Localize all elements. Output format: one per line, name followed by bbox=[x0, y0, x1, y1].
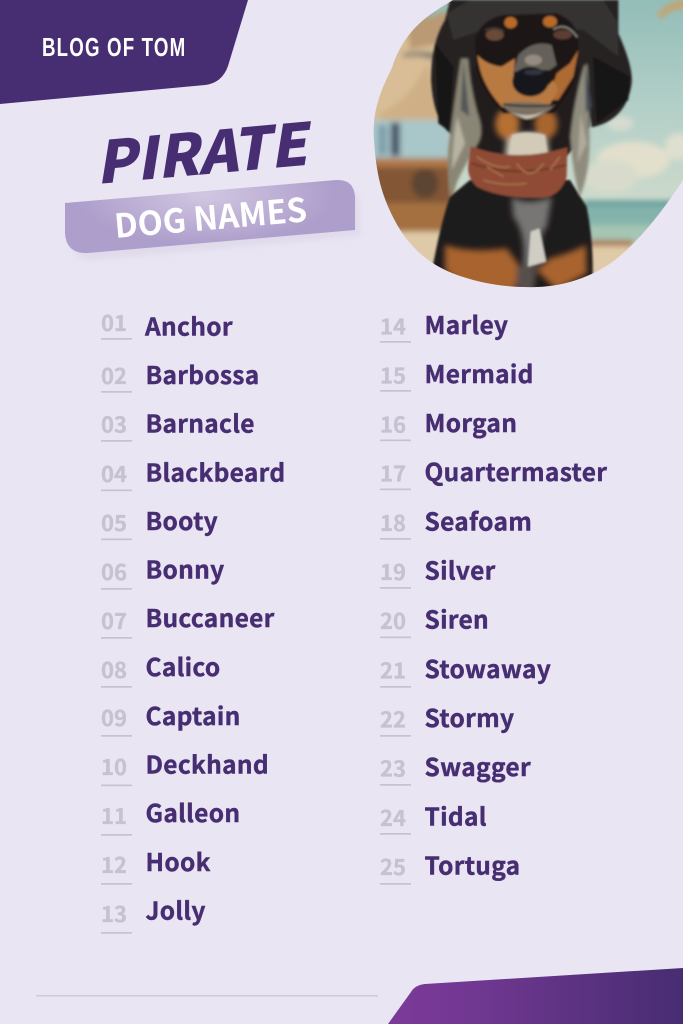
item 06 bbox=[101, 552, 224, 590]
item 09 bbox=[101, 698, 241, 737]
item 09: Captain bbox=[146, 698, 241, 733]
subtitle text: DOG NAMES bbox=[112, 183, 309, 248]
item 22: Stormy bbox=[424, 700, 514, 735]
item 05 bbox=[101, 503, 218, 540]
ship cabin bbox=[370, 120, 450, 158]
item 18: Seafoam bbox=[424, 504, 532, 538]
item 24 bbox=[380, 798, 487, 835]
item 12: 12 bbox=[101, 848, 127, 880]
item 18: 18 bbox=[380, 506, 406, 538]
item 04: 04 bbox=[101, 457, 127, 489]
item 19: 19 bbox=[380, 555, 406, 587]
item 17: 17 bbox=[380, 457, 406, 489]
item 15: Mermaid bbox=[424, 356, 534, 391]
pirate hat bbox=[431, 0, 632, 133]
item 13: Jolly bbox=[146, 892, 206, 928]
sea bbox=[585, 202, 668, 228]
item 02: Barbossa bbox=[146, 357, 259, 392]
tan cheeks bbox=[477, 55, 520, 113]
item 16: Morgan bbox=[424, 405, 517, 440]
footer rule bbox=[36, 995, 378, 996]
item 16: 16 bbox=[380, 408, 406, 440]
item 08: 08 bbox=[101, 653, 127, 685]
item 12 bbox=[101, 844, 211, 885]
item 21: 21 bbox=[380, 654, 406, 686]
item 07: Buccaneer bbox=[146, 600, 275, 635]
collar bbox=[468, 146, 567, 198]
item 10 bbox=[101, 746, 269, 786]
ship hull bbox=[370, 158, 453, 203]
item 24: 24 bbox=[380, 801, 406, 833]
sky bbox=[370, 0, 683, 300]
item 11: Galleon bbox=[146, 795, 240, 830]
item 25 bbox=[380, 847, 520, 885]
item 18 bbox=[380, 504, 532, 540]
item 01 bbox=[101, 306, 233, 344]
item 03: 03 bbox=[101, 408, 127, 440]
item 01: Anchor bbox=[144, 309, 233, 344]
item 11: 11 bbox=[101, 799, 127, 831]
item 23 bbox=[380, 749, 531, 786]
item 21: Stowaway bbox=[424, 651, 551, 686]
item 06: Bonny bbox=[146, 552, 224, 586]
item 07: 07 bbox=[101, 604, 127, 636]
item 14 bbox=[380, 307, 508, 343]
title: PIRATE: PIRATE bbox=[91, 97, 317, 201]
item 10: Deckhand bbox=[146, 746, 269, 782]
item 06: 06 bbox=[101, 555, 127, 587]
subtitle ribbon: DOG NAMES bbox=[65, 180, 360, 260]
item 20 bbox=[380, 602, 489, 638]
item 03 bbox=[101, 406, 255, 442]
item 11 bbox=[101, 795, 240, 836]
item 03: Barnacle bbox=[146, 406, 255, 440]
hair left bbox=[448, 58, 592, 197]
item 17: Quartermaster bbox=[424, 454, 607, 489]
ship sail bbox=[370, 20, 450, 120]
item 04: Blackbeard bbox=[146, 454, 285, 490]
item 13: 13 bbox=[101, 897, 127, 929]
mouth bbox=[502, 102, 555, 119]
item 10: 10 bbox=[101, 750, 127, 782]
item 13 bbox=[101, 892, 206, 934]
item 08: Calico bbox=[146, 649, 221, 684]
header banner bbox=[0, 0, 248, 104]
eyebrows bbox=[504, 17, 517, 28]
item 14: Marley bbox=[424, 307, 508, 342]
sand bbox=[401, 230, 452, 273]
item 25: Tortuga bbox=[424, 847, 520, 882]
item 09: 09 bbox=[101, 701, 127, 733]
body bbox=[431, 0, 632, 293]
names list: left column bbox=[101, 306, 285, 934]
photo: pirate dachshund in blob frame bbox=[370, 0, 683, 300]
snout bbox=[513, 43, 557, 72]
item 07 bbox=[101, 600, 275, 639]
item 16 bbox=[380, 405, 517, 441]
item 19 bbox=[380, 552, 496, 589]
item 20: 20 bbox=[380, 604, 406, 636]
item 20: Siren bbox=[424, 602, 489, 636]
item 08 bbox=[101, 649, 221, 688]
item 22: 22 bbox=[380, 703, 406, 735]
item 01: 01 bbox=[101, 306, 127, 338]
item 24: Tidal bbox=[424, 798, 487, 833]
item 23: 23 bbox=[380, 752, 406, 784]
item 14: 14 bbox=[380, 310, 406, 342]
item 05: Booty bbox=[146, 503, 218, 538]
item 15: 15 bbox=[380, 358, 406, 390]
footer corner shape bbox=[388, 968, 683, 1024]
item 19: Silver bbox=[424, 552, 496, 588]
item 22 bbox=[380, 700, 514, 737]
item 23: Swagger bbox=[424, 749, 531, 784]
hair right bbox=[570, 63, 590, 197]
brand name: BLOG OF TOM bbox=[42, 32, 186, 62]
neck and hat flaps bbox=[450, 63, 590, 157]
chest and leg markings bbox=[445, 197, 587, 293]
item 25: 25 bbox=[380, 850, 406, 882]
names list: right column bbox=[380, 307, 607, 885]
nose bbox=[512, 67, 548, 96]
item 05: 05 bbox=[101, 506, 127, 538]
head bbox=[475, 13, 578, 113]
eyes bbox=[486, 29, 504, 41]
item 12: Hook bbox=[146, 844, 211, 879]
item 02: 02 bbox=[101, 359, 127, 391]
